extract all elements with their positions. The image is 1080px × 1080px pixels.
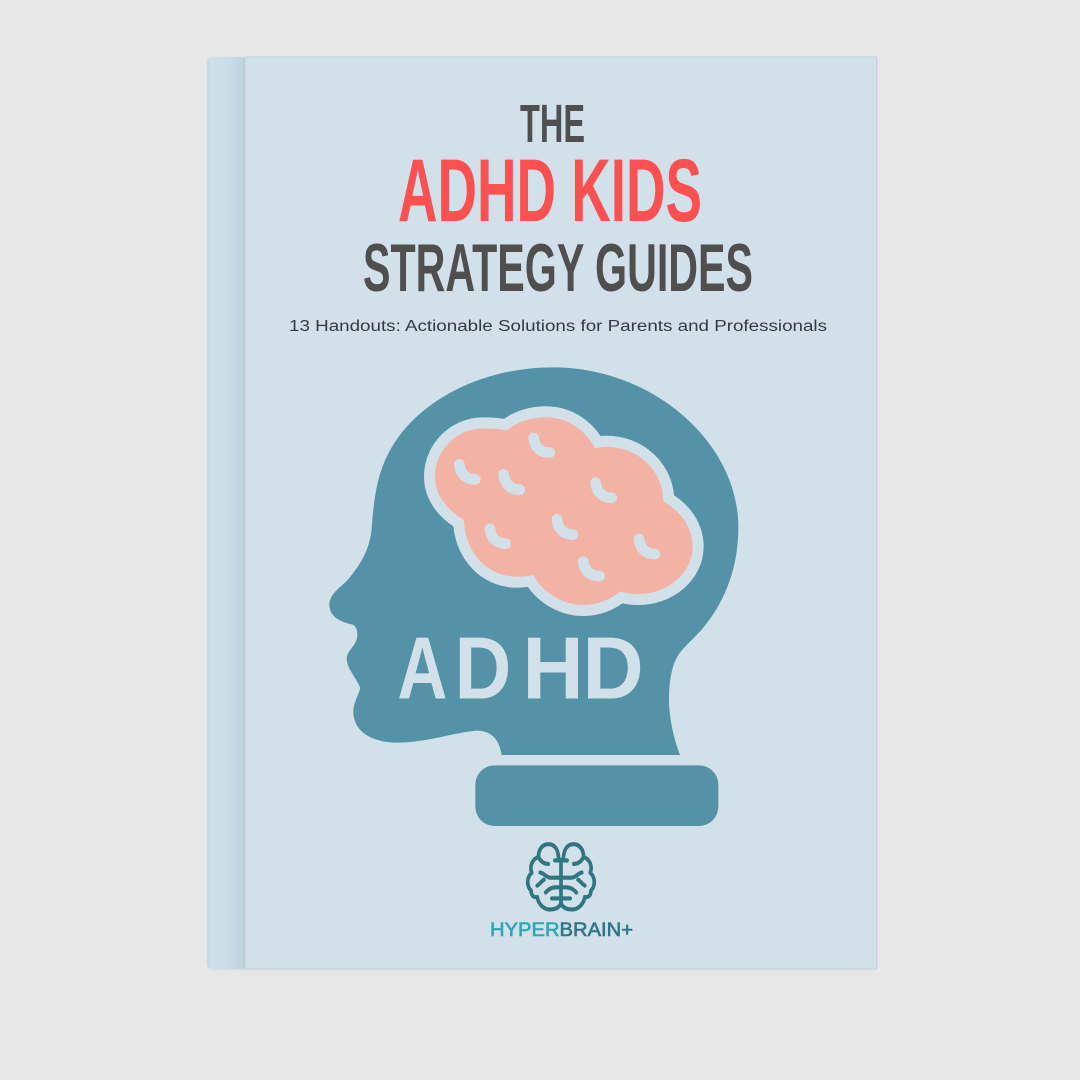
pedestal bar [475,765,718,826]
logo wordmark: HYPERBRAIN+ [490,919,633,941]
head silhouette [329,367,738,755]
ADHD label [397,618,644,717]
brain folds [459,438,655,576]
ADHD label: D [582,618,644,717]
brain [435,417,693,605]
subtitle: 13 Handouts: Actionable Solutions for Parents and Professionals [289,318,827,335]
title: THE: THE [520,94,585,154]
ADHD label: D [455,618,511,717]
icon: head with brain [329,367,738,826]
title: ADHD KIDS: ADHD KIDS [398,140,702,240]
icon: logo brain [528,844,594,909]
ADHD label: A [397,618,447,717]
ADHD label: H [522,618,584,717]
book spine [207,57,246,969]
front cover [245,57,876,969]
logo: Hyperbrain+ [490,844,633,941]
book [207,57,878,970]
book shadow [207,57,878,970]
title: STRATEGY GUIDES: STRATEGY GUIDES [363,230,753,306]
